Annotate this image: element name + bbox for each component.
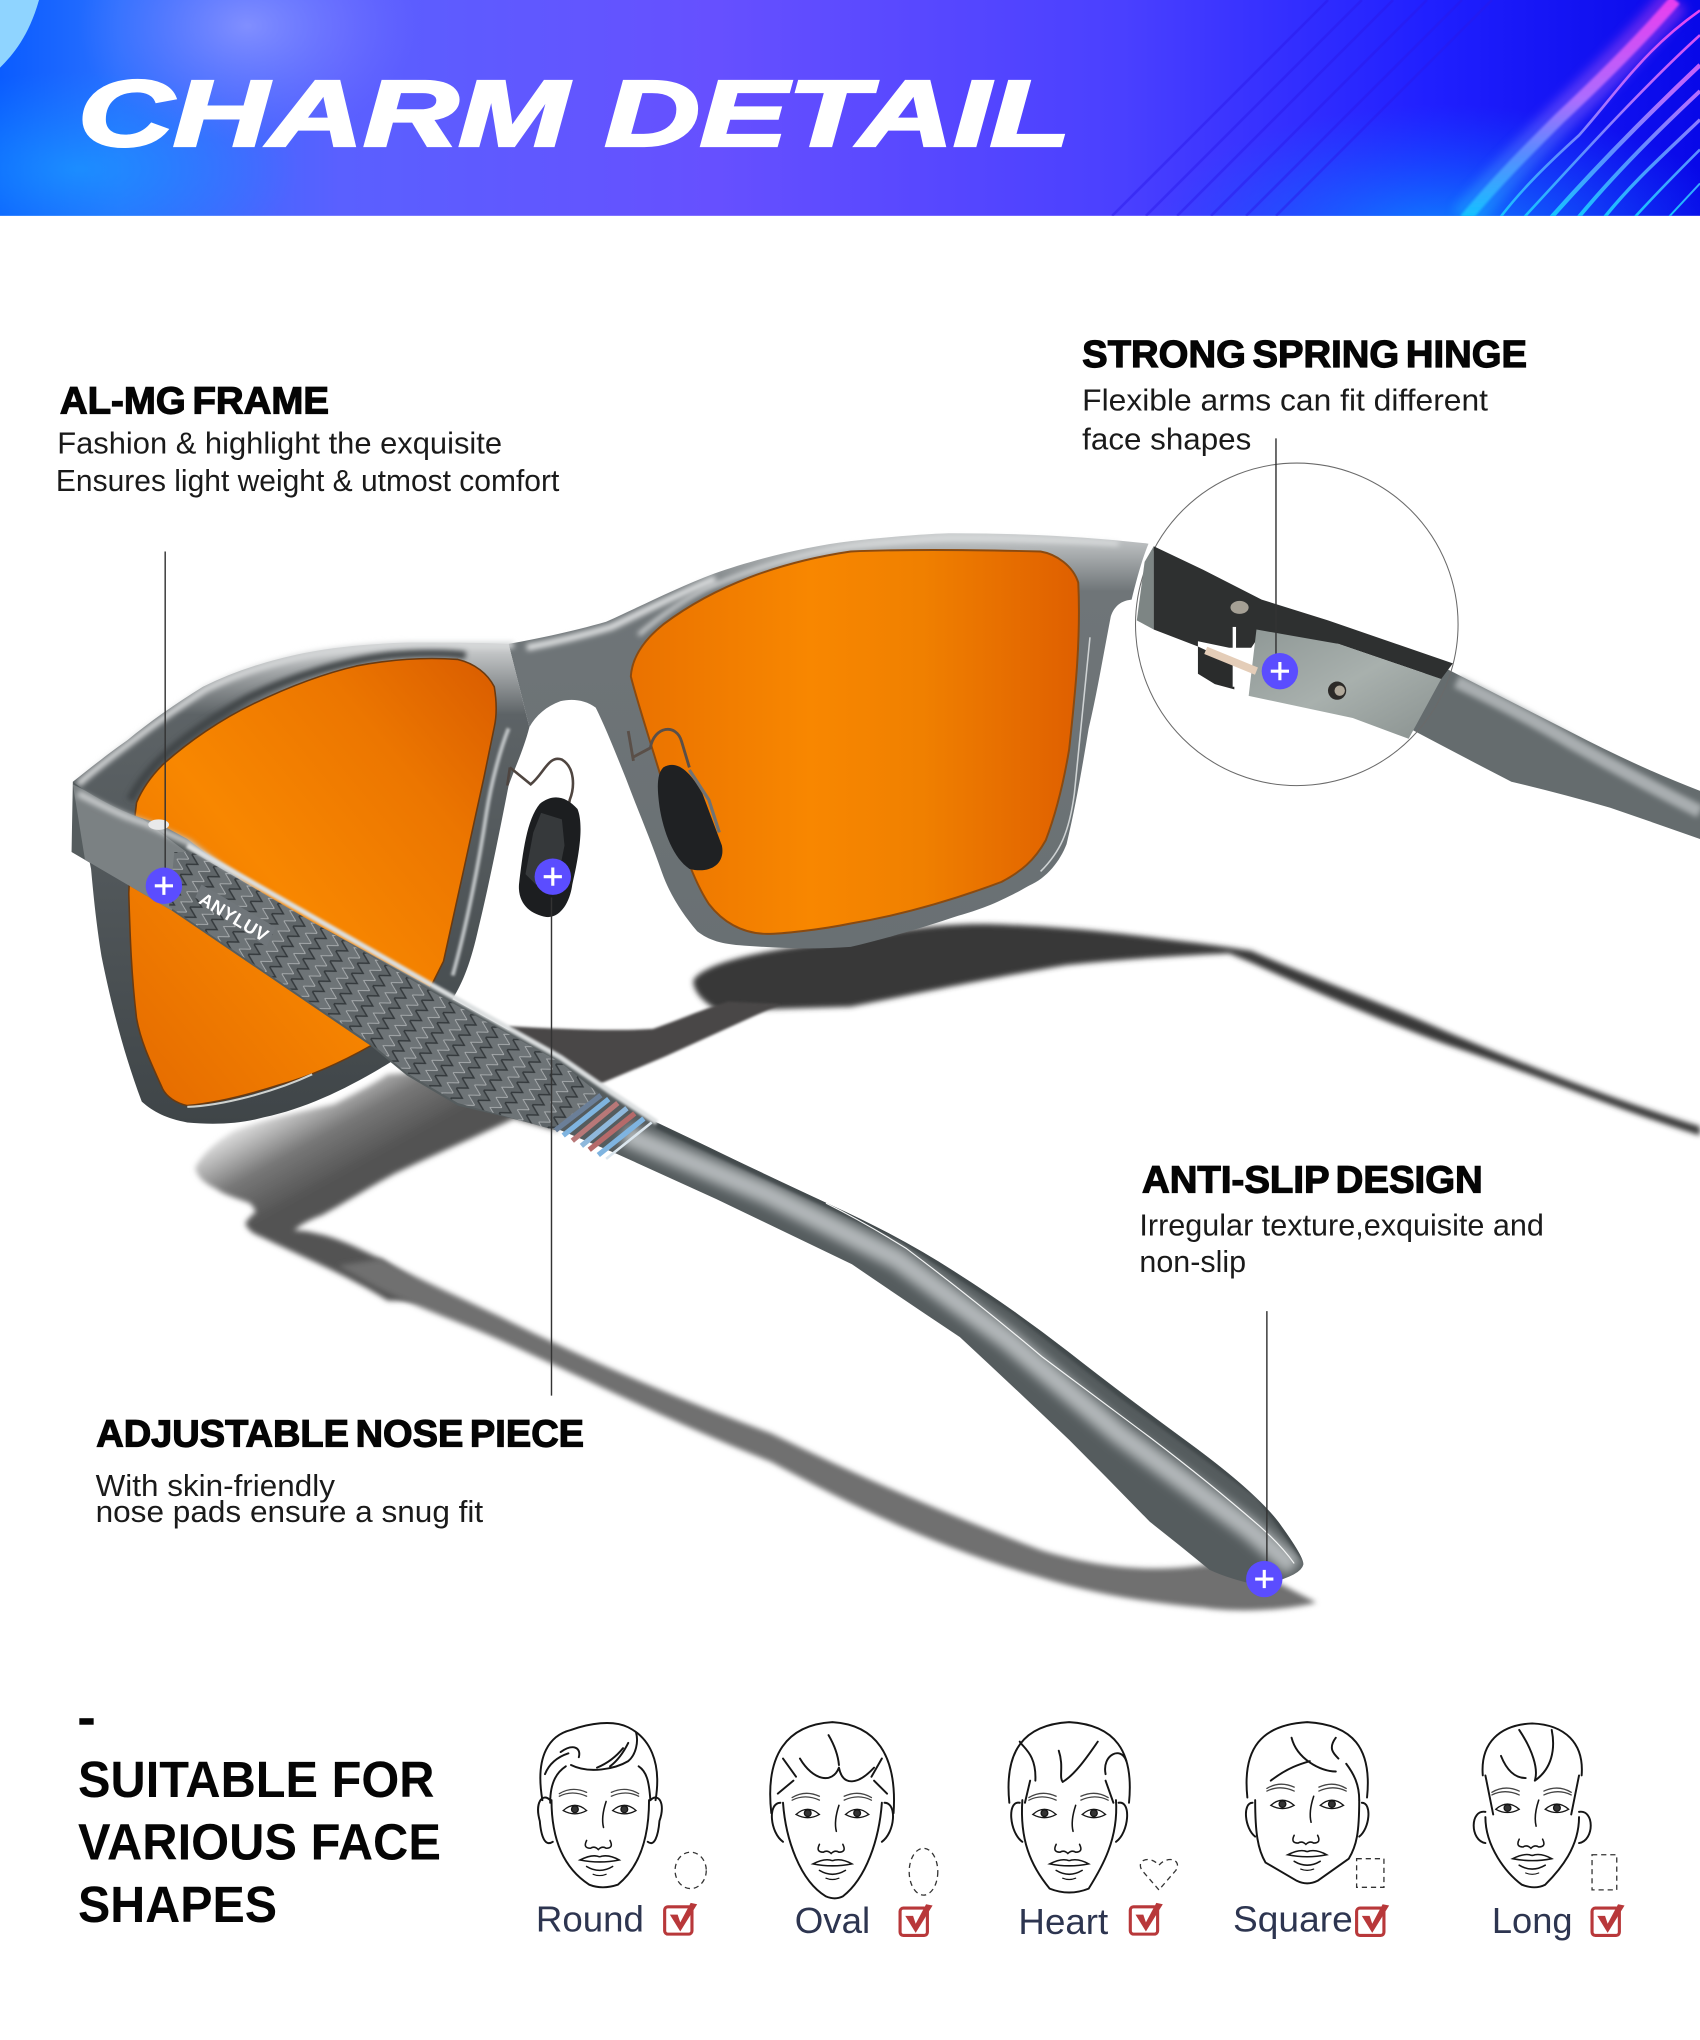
label: oval: Oval xyxy=(795,1900,870,1941)
callout: adjustable nose piece: With skin-friendly xyxy=(96,1468,336,1503)
callout: al-mg frame: Fashion & highlight the exquisite xyxy=(57,425,502,460)
checkbox: square xyxy=(1357,1904,1389,1935)
callout: adjustable nose piece: ADJUSTABLE NOSE PIECE xyxy=(96,1412,584,1454)
brand plate: ANYLUV xyxy=(196,889,273,946)
left nose pad xyxy=(507,759,581,917)
checkbox: heart xyxy=(1130,1903,1163,1934)
face: heart xyxy=(1009,1722,1130,1893)
right temple arm xyxy=(1400,661,1700,839)
callout: strong spring hinge: Flexible arms can fit different xyxy=(1082,382,1488,417)
marker: nose piece xyxy=(535,858,571,895)
checkbox: round xyxy=(665,1903,697,1934)
face: oval xyxy=(770,1722,894,1898)
heading: suitable for various face shapes xyxy=(78,1718,441,1933)
callout: adjustable nose piece xyxy=(96,1412,584,1529)
callout lines xyxy=(165,438,1276,1579)
dashed shape: long xyxy=(1592,1855,1617,1890)
marker: al-mg frame xyxy=(146,868,182,904)
left temple arm xyxy=(52,767,1327,1600)
spring hinge xyxy=(1137,546,1453,739)
right nose pad xyxy=(628,729,722,870)
callout: anti-slip design xyxy=(1139,1159,1544,1279)
callout: strong spring hinge xyxy=(1082,333,1527,456)
cast shadow xyxy=(195,924,1700,1610)
hinge closeup circle xyxy=(1136,463,1458,786)
callout: strong spring hinge: face shapes xyxy=(1082,421,1251,456)
coloured stripes xyxy=(555,1095,652,1159)
checkbox: oval xyxy=(900,1904,933,1935)
dashed shape: heart xyxy=(1140,1860,1177,1890)
heading: suitable for various face shapes: SHAPES xyxy=(78,1876,277,1933)
heading: suitable for various face shapes: VARIOUS FACE xyxy=(78,1813,441,1870)
textured anti-slip panel xyxy=(169,852,601,1130)
header banner xyxy=(0,0,1700,216)
marker: hinge xyxy=(1262,653,1298,689)
callout: adjustable nose piece: nose pads ensure a snug fit xyxy=(96,1494,484,1529)
sunglasses xyxy=(52,463,1700,1600)
callout: al-mg frame: AL-MG FRAME xyxy=(60,380,329,422)
label: round: Round xyxy=(536,1899,644,1940)
marker: anti-slip xyxy=(1246,1561,1282,1597)
right frame and lens xyxy=(509,533,1149,948)
callout: al-mg frame xyxy=(56,380,560,498)
heading: suitable for various face shapes: SUITABLE FOR xyxy=(78,1751,434,1808)
nose pads xyxy=(507,729,722,917)
callout: anti-slip design: non-slip xyxy=(1139,1244,1246,1279)
face: long xyxy=(1474,1723,1591,1887)
callout: anti-slip design: ANTI-SLIP DESIGN xyxy=(1142,1159,1483,1201)
face: square xyxy=(1246,1722,1368,1883)
checkbox: long xyxy=(1592,1904,1625,1935)
label: long: Long xyxy=(1492,1900,1573,1941)
temple highlight line xyxy=(826,1203,1294,1563)
face: round xyxy=(538,1723,662,1887)
left frame and lens xyxy=(73,643,529,1124)
label: square: Square xyxy=(1233,1899,1353,1940)
callout: anti-slip design: Irregular texture,exquisite and xyxy=(1139,1208,1544,1243)
callout: strong spring hinge: STRONG SPRING HINGE xyxy=(1082,333,1527,375)
dashed shape: round xyxy=(675,1852,706,1889)
label: heart: Heart xyxy=(1018,1901,1108,1942)
title: CHARM DETAIL xyxy=(78,61,1070,166)
dashed shape: oval xyxy=(909,1848,938,1895)
callout: al-mg frame: Ensures light weight & utmost comfort xyxy=(56,463,560,498)
dashed shape: square xyxy=(1357,1859,1384,1887)
